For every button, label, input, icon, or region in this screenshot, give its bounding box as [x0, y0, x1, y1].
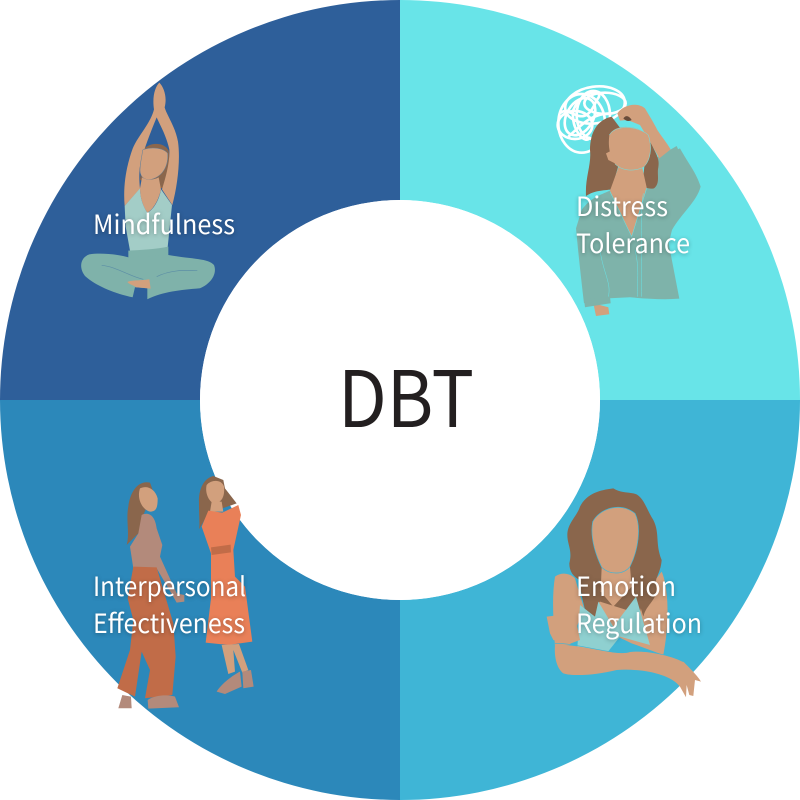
figure: left woman	[117, 482, 184, 709]
label: Emotion Regulation: Emotion	[576, 565, 676, 604]
center circle	[200, 200, 600, 600]
icon: distressed woman	[558, 83, 701, 316]
icon: meditating woman	[81, 83, 215, 299]
icon: woman with crossed arms	[547, 488, 701, 697]
figure: right woman	[199, 476, 254, 694]
segment: mindfulness	[0, 0, 400, 400]
label: Distress Tolerance	[576, 185, 690, 261]
label: Distress Tolerance: Distress	[576, 185, 668, 224]
title: DBT: DBT	[338, 338, 474, 450]
sleeve and shirt	[593, 303, 609, 316]
label: Mindfulness: Mindfulness	[93, 203, 235, 242]
label: Emotion Regulation: Regulation	[576, 602, 702, 641]
label: Distress Tolerance: Tolerance	[576, 222, 690, 261]
label: Interpersonal Effectiveness	[93, 565, 246, 641]
label: Interpersonal Effectiveness: Effectiveness	[93, 602, 245, 641]
icon: two women walking	[117, 476, 254, 709]
icon: scribble	[558, 83, 627, 153]
segment: distress tolerance	[400, 0, 800, 400]
label: Emotion Regulation	[576, 565, 702, 641]
label: Interpersonal Effectiveness: Interpersonal	[93, 565, 246, 604]
segment: emotion regulation	[400, 400, 800, 800]
segment: interpersonal effectiveness	[0, 400, 400, 800]
